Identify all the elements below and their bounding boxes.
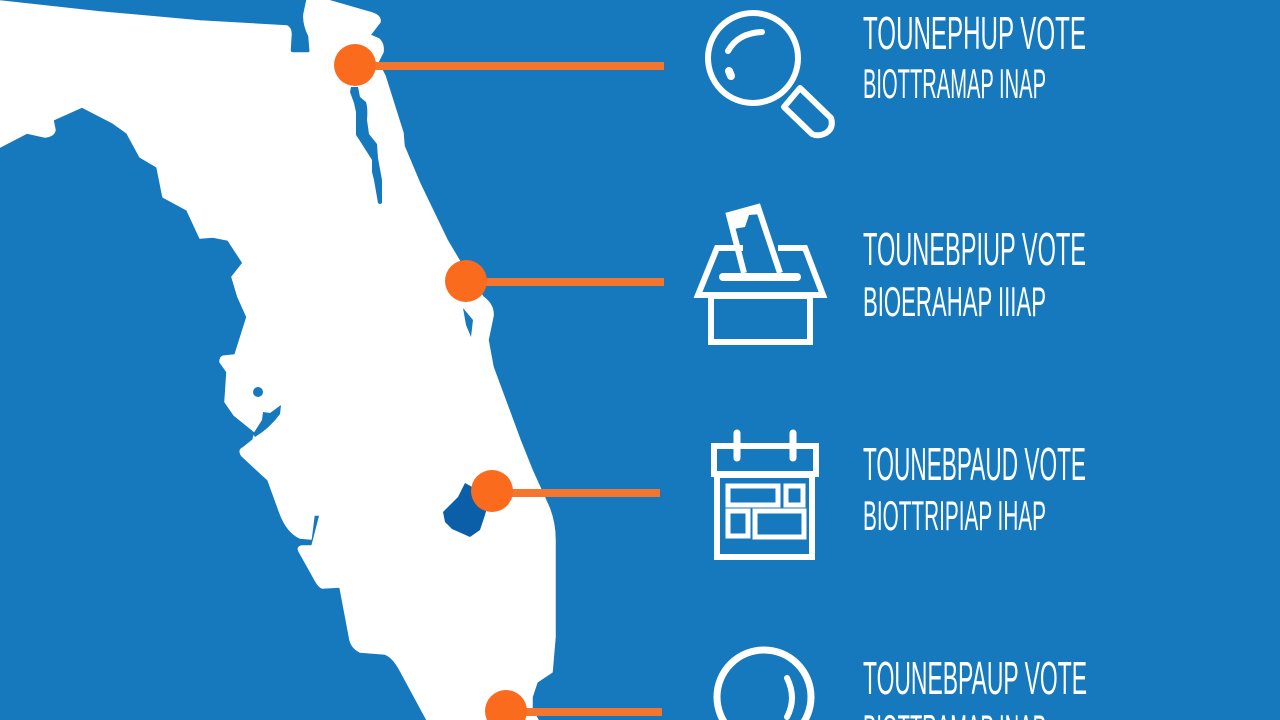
marker: south connector	[471, 470, 660, 512]
text: row 4	[863, 652, 1087, 720]
text: row 1	[863, 7, 1086, 107]
lagoon: Indian River	[463, 308, 473, 337]
text: row 3: BIOTTRIPIAP IHAP	[863, 492, 1046, 539]
icon: magnifying glass lower	[717, 650, 811, 720]
river: St Johns	[350, 87, 382, 204]
bay: Tampa	[253, 405, 281, 437]
icon: magnifying glass	[708, 13, 832, 135]
text: row 1: BIOTTRAMAP INAP	[863, 60, 1046, 107]
marker: bottom connector	[485, 690, 662, 720]
marker: central connector	[445, 260, 664, 302]
text: row 2	[863, 223, 1086, 325]
icon: calendar	[714, 433, 816, 557]
text: row 2: BIOERAHAP IIIAP	[863, 278, 1046, 325]
lake: small inland lake	[253, 387, 263, 397]
lake: Okeechobee	[443, 483, 490, 537]
text: row 1: TOUNEPHUP VOTE	[863, 7, 1086, 59]
map: Florida	[0, 0, 555, 720]
icon: ballot box	[698, 204, 823, 342]
text: row 3	[863, 438, 1086, 539]
marker: north connector	[334, 44, 664, 86]
